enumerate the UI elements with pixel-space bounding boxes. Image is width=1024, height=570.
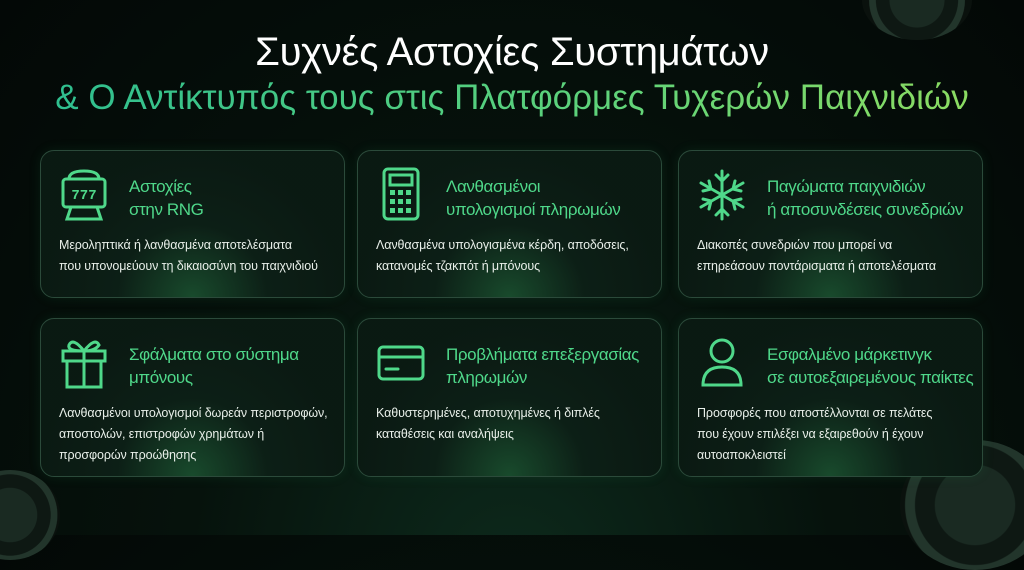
heading <box>446 177 620 219</box>
description <box>697 406 932 462</box>
heading <box>129 345 299 387</box>
icon: card <box>378 346 424 380</box>
description: που υπονομεύουν τη δικαιοσύνη του παιχνιδιού <box>59 259 318 273</box>
heading: ή αποσυνδέσεις συνεδριών <box>767 200 963 219</box>
icon: slot machine <box>62 170 106 220</box>
heading <box>767 345 974 387</box>
panel: RNG <box>40 150 345 298</box>
heading: Σφάλματα στο σύστημα <box>129 345 299 364</box>
description: Προσφορές που αποστέλλονται σε πελάτες <box>697 406 932 420</box>
decorative chip bottom left <box>0 470 60 560</box>
heading <box>129 177 203 219</box>
heading: σε αυτοεξαιρεμένους παίκτες <box>767 368 973 387</box>
heading: Προβλήματα επεξεργασίας <box>446 345 639 364</box>
icon: gift <box>62 340 106 388</box>
description <box>59 238 318 273</box>
decorative chip bottom right <box>900 440 1024 570</box>
panel: freezes <box>678 150 983 298</box>
icon: slot machine: 777 <box>71 188 97 204</box>
heading: πληρωμών <box>446 368 527 387</box>
panel: marketing <box>678 318 983 477</box>
description: Καθυστερημένες, αποτυχημένες ή διπλές <box>376 406 600 420</box>
description <box>376 406 600 441</box>
panel: payments calc <box>357 150 662 298</box>
decorative chip top right <box>862 0 972 40</box>
description <box>59 406 328 462</box>
heading: υπολογισμοί πληρωμών <box>446 200 620 219</box>
description: Λανθασμένα υπολογισμένα κέρδη, αποδόσεις, <box>376 238 629 252</box>
description: κατανομές τζακπότ ή μπόνους <box>376 259 540 273</box>
panel: bonus <box>40 318 345 477</box>
description: προσφορών προώθησης <box>59 448 196 462</box>
description: επηρεάσουν ποντάρισματα ή αποτελέσματα <box>697 259 936 273</box>
heading: μπόνους <box>129 368 193 387</box>
subtitle: & Ο Αντίκτυπός τους στις Πλατφόρμες Τυχερών Παιχνιδιών <box>55 78 969 117</box>
icon: snowflake <box>699 170 745 220</box>
heading <box>446 345 639 387</box>
heading: Παγώματα παιχνιδιών <box>767 177 925 196</box>
description: αποστολών, επιστροφών χρημάτων ή <box>59 427 264 441</box>
icon: user <box>702 338 742 386</box>
description: Διακοπές συνεδριών που μπορεί να <box>697 238 892 252</box>
description: Λανθασμένοι υπολογισμοί δωρεάν περιστροφών, <box>59 406 328 420</box>
heading <box>767 177 963 219</box>
title: Συχνές Αστοχίες Συστημάτων <box>255 30 769 74</box>
description: αυτοαποκλειστεί <box>697 448 786 462</box>
heading: στην RNG <box>129 200 203 219</box>
panel: payment processing <box>357 318 662 477</box>
description: καταθέσεις και αναλήψεις <box>376 427 514 441</box>
icon: calculator <box>382 168 420 220</box>
heading: Αστοχίες <box>129 177 192 196</box>
description <box>697 238 936 273</box>
heading: Λανθασμένοι <box>446 177 540 196</box>
heading: Εσφαλμένο μάρκετινγκ <box>767 345 932 364</box>
description: Μεροληπτικά ή λανθασμένα αποτελέσματα <box>59 238 292 252</box>
description: που έχουν επιλέξει να εξαιρεθούν ή έχουν <box>697 427 923 441</box>
description <box>376 238 629 273</box>
